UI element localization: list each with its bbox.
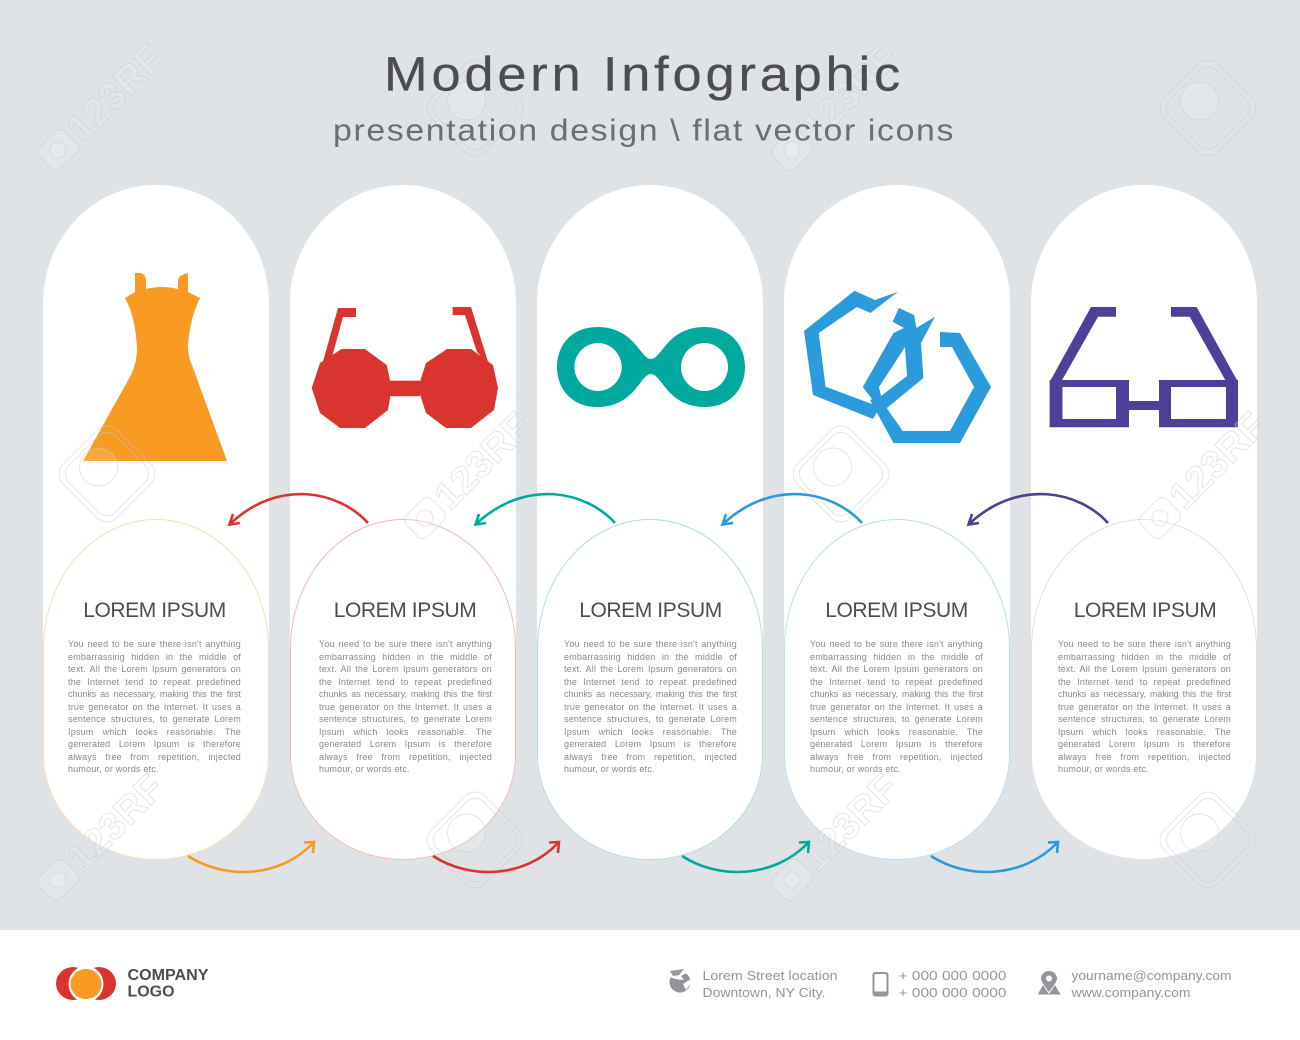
paragraph: sentence structures, to generate Lorem [1058, 714, 1231, 724]
paragraph: generated Lorem Ipsum is therefore [68, 739, 241, 749]
panel: dress [43, 185, 269, 860]
heading: LOREM IPSUM [334, 598, 476, 622]
arrow: top red [230, 494, 368, 524]
company logo: COMPANY [128, 967, 209, 984]
paragraph: Ipsum which looks reasonable. The [319, 726, 492, 736]
paragraph: You need to be sure there isn't anything [1058, 639, 1231, 649]
phone text: + 000 000 0000 [898, 985, 1006, 1000]
paragraph: text. All the Lorem Ipsum generators on [1058, 664, 1231, 674]
paragraph: You need to be sure there isn't anything [564, 639, 737, 649]
paragraph: generated Lorem Ipsum is therefore [564, 739, 737, 749]
icon: blue earrings [804, 290, 991, 443]
paragraph: embarrassing hidden in the middle of [1058, 652, 1231, 662]
icon: teal glasses [557, 327, 745, 407]
heading: LOREM IPSUM [83, 598, 226, 622]
contact text: yourname@company.com [1072, 968, 1232, 983]
paragraph: true generator on the Internet. It uses a [810, 702, 983, 712]
paragraph: chunks as necessary, making this the first [68, 689, 241, 699]
phone text [898, 968, 1006, 1000]
paragraph: Ipsum which looks reasonable. The [68, 726, 241, 736]
paragraph: text. All the Lorem Ipsum generators on [810, 664, 983, 674]
company logo [56, 966, 209, 1002]
subtitle: presentation design \ flat vector icons [333, 112, 955, 148]
paragraph: embarrassing hidden in the middle of [564, 652, 737, 662]
panel: square glasses [1031, 185, 1257, 860]
paragraph: chunks as necessary, making this the first [810, 689, 983, 699]
arrow: bottom teal [682, 842, 809, 872]
panel: sunglasses [290, 185, 516, 860]
address text: Downtown, NY City. [702, 985, 826, 1000]
arrow: bottom blue [931, 842, 1058, 872]
paragraph [1058, 639, 1231, 774]
paragraph: You need to be sure there isn't anything [810, 639, 983, 649]
title: Modern Infographic [384, 48, 904, 102]
paragraph: true generator on the Internet. It uses a [68, 702, 241, 712]
paragraph [810, 639, 983, 774]
paragraph: humour, or words etc. [68, 764, 159, 774]
paragraph: humour, or words etc. [810, 764, 901, 774]
paragraph: true generator on the Internet. It uses a [319, 702, 492, 712]
paragraph: text. All the Lorem Ipsum generators on [68, 664, 241, 674]
paragraph: sentence structures, to generate Lorem [319, 714, 492, 724]
paragraph: the Internet tend to repeat predefined [1058, 676, 1231, 686]
contact text [1070, 968, 1232, 1000]
arrow: top teal [476, 494, 615, 524]
paragraph: chunks as necessary, making this the first [564, 689, 737, 699]
panel: earrings [784, 185, 1010, 860]
watermark stamps: 123RF [1161, 405, 1275, 518]
text oval [1031, 519, 1257, 860]
paragraph: You need to be sure there isn't anything [319, 639, 492, 649]
paragraph: always free from repetition, injected [68, 752, 241, 762]
arrow: top blue [722, 494, 862, 524]
paragraph [319, 639, 492, 774]
paragraph [68, 639, 241, 774]
address text: Lorem Street location [702, 968, 838, 983]
paragraph: always free from repetition, injected [810, 752, 983, 762]
paragraph: humour, or words etc. [1058, 764, 1149, 774]
paragraph: the Internet tend to repeat predefined [68, 676, 241, 686]
paragraph: generated Lorem Ipsum is therefore [810, 739, 983, 749]
watermark stamps: 123RF [793, 37, 907, 150]
watermark stamps: 123RF [59, 37, 173, 150]
paragraph: humour, or words etc. [564, 764, 655, 774]
paragraph: sentence structures, to generate Lorem [564, 714, 737, 724]
paragraph: Ipsum which looks reasonable. The [564, 726, 737, 736]
paragraph: always free from repetition, injected [1058, 752, 1231, 762]
icon: purple glasses [1050, 307, 1238, 428]
paragraph: generated Lorem Ipsum is therefore [319, 739, 492, 749]
panel: round glasses [537, 185, 763, 860]
watermark stamps: 123RF [59, 767, 173, 880]
paragraph: embarrassing hidden in the middle of [810, 652, 983, 662]
paragraph: the Internet tend to repeat predefined [319, 676, 492, 686]
paragraph: Ipsum which looks reasonable. The [810, 726, 983, 736]
paragraph: the Internet tend to repeat predefined [564, 676, 737, 686]
phone text: + 000 000 0000 [898, 968, 1006, 983]
heading: LOREM IPSUM [825, 598, 968, 622]
paragraph: sentence structures, to generate Lorem [810, 714, 983, 724]
company logo: LOGO [128, 984, 174, 1000]
paragraph: text. All the Lorem Ipsum generators on [319, 664, 492, 674]
text oval [784, 519, 1010, 860]
paragraph: true generator on the Internet. It uses a [1058, 702, 1231, 712]
icon: dress [83, 273, 227, 461]
paragraph: always free from repetition, injected [564, 752, 737, 762]
arrow: bottom red [433, 842, 559, 872]
paragraph: sentence structures, to generate Lorem [68, 714, 241, 724]
icon: map pin [1038, 971, 1061, 994]
paragraph: always free from repetition, injected [319, 752, 492, 762]
text oval [43, 519, 269, 860]
text oval [537, 519, 763, 860]
heading: LOREM IPSUM [1074, 598, 1216, 622]
paragraph: Ipsum which looks reasonable. The [1058, 726, 1231, 736]
contact text: www.company.com [1070, 985, 1190, 1000]
address text [702, 968, 838, 1000]
arrow: bottom orange [188, 842, 314, 872]
watermark stamps: 123RF [793, 767, 907, 880]
paragraph: the Internet tend to repeat predefined [810, 676, 983, 686]
paragraph: text. All the Lorem Ipsum generators on [564, 664, 737, 674]
paragraph: true generator on the Internet. It uses a [564, 702, 737, 712]
paragraph: embarrassing hidden in the middle of [68, 652, 241, 662]
heading: LOREM IPSUM [579, 598, 722, 622]
paragraph [564, 639, 737, 774]
paragraph: generated Lorem Ipsum is therefore [1058, 739, 1231, 749]
icon: globe [668, 969, 691, 992]
icon: red sunglasses [312, 307, 498, 428]
watermark stamps: 123RF [426, 405, 540, 518]
paragraph: embarrassing hidden in the middle of [319, 652, 492, 662]
arrow: top purple [968, 494, 1108, 524]
paragraph: chunks as necessary, making this the first [319, 689, 492, 699]
text oval [290, 519, 516, 860]
paragraph: humour, or words etc. [319, 764, 410, 774]
paragraph: chunks as necessary, making this the first [1058, 689, 1231, 699]
footer band [0, 930, 1300, 1040]
icon: phone [874, 973, 888, 996]
paragraph: You need to be sure there isn't anything [68, 639, 241, 649]
